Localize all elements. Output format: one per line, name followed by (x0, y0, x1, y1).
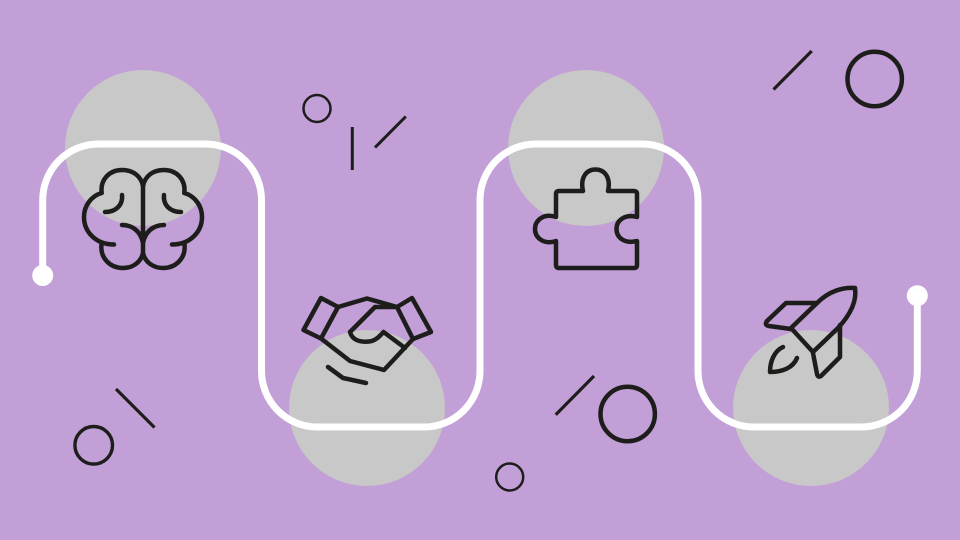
decoration: diagonal line top right (774, 51, 812, 90)
decoration: small circle bottom centre (496, 464, 523, 490)
grey circle: handshake (289, 330, 445, 486)
icon: rocket (766, 288, 855, 377)
grey circle: brain (65, 70, 221, 226)
grey circle: puzzle (508, 70, 664, 226)
grey circle: rocket (733, 330, 889, 486)
decoration: diagonal line top centre (375, 116, 406, 148)
icon: puzzle piece (535, 170, 637, 268)
decoration: large circle top right (848, 52, 902, 106)
decoration: circle bottom left (75, 426, 112, 464)
icon: brain (84, 170, 202, 268)
decoration: diagonal line bottom left (116, 389, 154, 428)
decoration: vertical line top centre (351, 127, 354, 170)
decoration: large circle bottom centre (600, 387, 655, 441)
decoration: diagonal line bottom centre (556, 376, 594, 415)
icon: handshake (304, 298, 431, 383)
decoration: small circle top centre (304, 95, 330, 122)
winding white path (32, 144, 928, 427)
